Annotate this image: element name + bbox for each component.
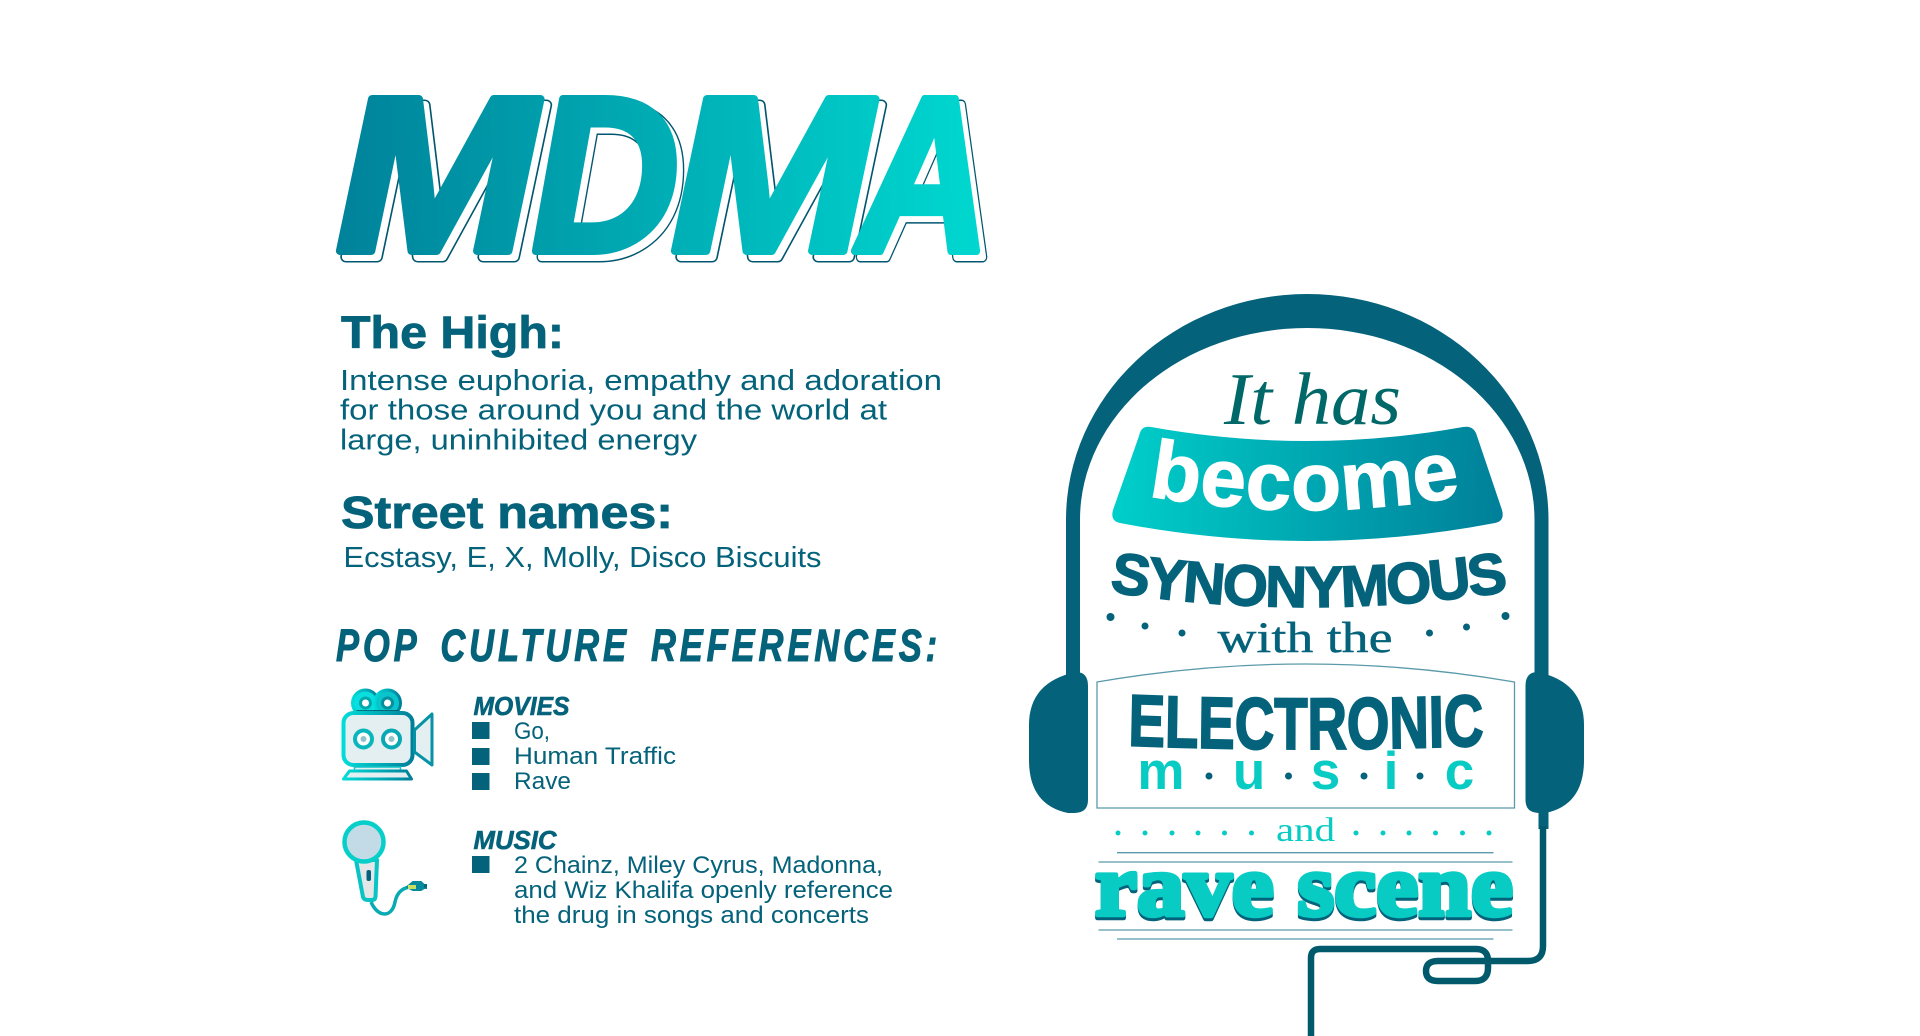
heading: movies: MOVIES	[474, 691, 570, 721]
bullet list: movies: Go,	[514, 718, 550, 745]
text block: street names list: Ecstasy, E, X, Molly, Disco Biscuits	[344, 542, 822, 574]
bullet: music list: 2 Chainz, Miley Cyrus, Madonna,	[514, 852, 883, 879]
heading: street names: Street names:	[341, 487, 673, 538]
bullet list: movies: Human Traffic	[514, 743, 676, 770]
text: electronic: ELECTRONIC	[1131, 694, 1484, 750]
text block: the high description: large, uninhibited energy	[340, 424, 698, 456]
text: rave scene: rave scene	[1095, 841, 1513, 938]
title: MDMA: M	[342, 57, 546, 304]
section: movies	[472, 691, 676, 795]
title: MDMA	[336, 51, 996, 304]
headline: it has become synonymous with the electronic music and rave scene	[1095, 359, 1516, 940]
title: MDMA: D	[538, 57, 685, 304]
dots: beside and	[1116, 830, 1492, 836]
text: music: s	[1311, 742, 1340, 801]
cable connector	[1538, 812, 1548, 829]
bullet: music list: the drug in songs and concerts	[514, 902, 869, 929]
bullet: music list: and Wiz Khalifa openly reference	[514, 877, 893, 904]
title: MDMA: A	[860, 57, 996, 304]
dots: left and right of with the	[1106, 612, 1510, 636]
text: music: m	[1137, 742, 1185, 801]
bullet: music list	[472, 852, 893, 929]
text: and: and	[1276, 812, 1335, 849]
headband	[1066, 294, 1548, 690]
text: rave scene: rave scene	[1095, 838, 1513, 935]
text: music: c	[1445, 742, 1474, 801]
section: street names	[341, 487, 822, 574]
section: the high	[340, 307, 942, 456]
text: it has: It has	[1223, 359, 1401, 441]
left ear cup	[1029, 672, 1088, 813]
banner: become: become	[1152, 438, 1457, 512]
title: MDMA: D	[538, 57, 685, 304]
text: synonymous: SYNONYMOUS	[1112, 553, 1506, 608]
icon: microphone	[344, 822, 427, 914]
text: music: u	[1233, 742, 1265, 801]
icon: movie camera	[344, 690, 432, 779]
title: MDMA: M	[342, 57, 546, 304]
heading: pop culture references: POP CULTURE REFERENCES:	[336, 620, 941, 671]
heading: music: MUSIC	[474, 825, 558, 855]
heading: the high: The High:	[341, 307, 564, 358]
text: with the: with the	[1218, 615, 1392, 662]
dots: music separators	[1206, 772, 1424, 780]
bullet list: movies	[472, 718, 676, 795]
title: MDMA: M	[677, 57, 881, 304]
right ear cup	[1526, 672, 1584, 813]
section: music	[472, 825, 893, 929]
illustration: headphones	[1029, 294, 1584, 1036]
title: MDMA: A	[854, 51, 990, 298]
title: MDMA: M	[671, 51, 875, 298]
text block: the high description: for those around you and the world at	[340, 394, 887, 426]
text block: the high description	[340, 365, 942, 456]
text: music: i	[1384, 742, 1398, 801]
text block: the high description: Intense euphoria, empathy and adoration	[340, 365, 942, 397]
title: MDMA: M	[336, 51, 540, 298]
title: MDMA: D	[532, 51, 679, 298]
cable	[1311, 826, 1543, 1036]
title: MDMA: M	[677, 57, 881, 304]
text: music	[1137, 742, 1474, 801]
title: MDMA: A	[860, 57, 996, 304]
panel: electronic music box	[1096, 663, 1516, 809]
bullet list: movies: Rave	[514, 768, 571, 795]
